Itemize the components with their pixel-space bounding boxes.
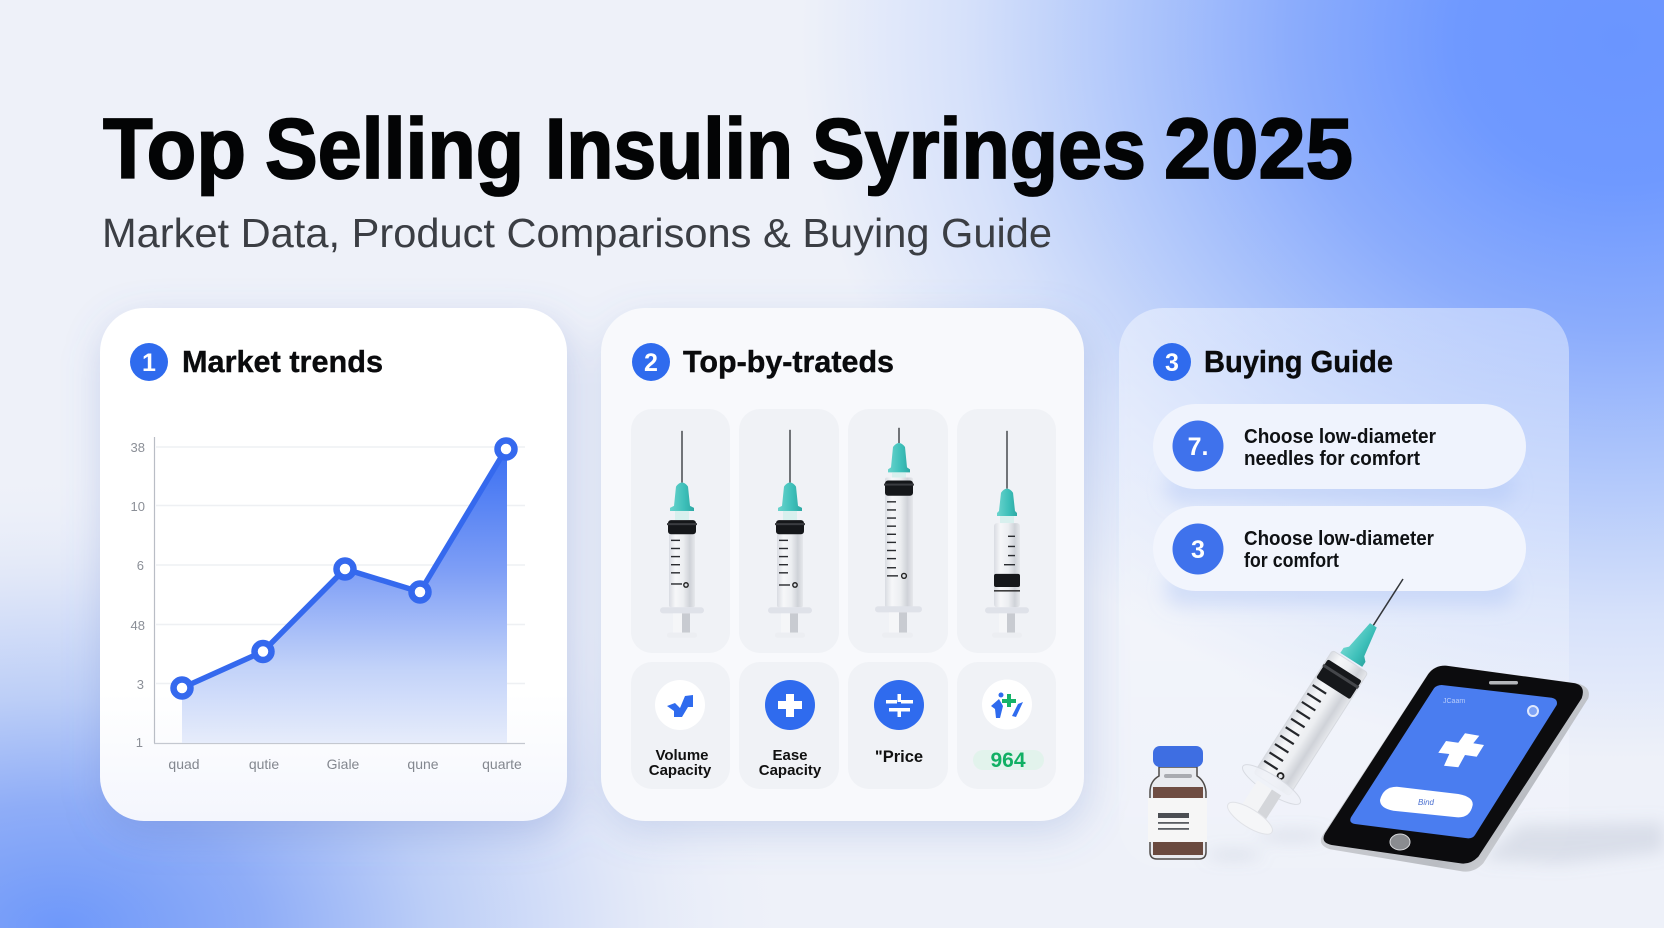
y axis labels: 10 xyxy=(131,499,145,514)
x axis labels: quarte xyxy=(482,756,522,772)
product tiles xyxy=(631,409,1056,789)
syringe 3 xyxy=(875,428,922,638)
label: volume capacity: Capacity xyxy=(649,762,712,779)
chart area fill xyxy=(182,449,507,743)
title: Selling xyxy=(265,102,524,197)
title: Syringes xyxy=(812,102,1146,197)
trend line xyxy=(182,449,506,688)
tip 1: 7. xyxy=(1188,433,1208,461)
heading badge 3 xyxy=(1153,343,1191,381)
icon: ease xyxy=(765,680,815,730)
label: ease capacity: Ease xyxy=(772,747,808,764)
score pill xyxy=(973,749,1044,772)
heading badge 2: 2 xyxy=(644,349,658,377)
panel: market trends xyxy=(100,308,567,821)
phone button xyxy=(1380,787,1473,817)
heading: buying guide: Buying Guide xyxy=(1204,344,1393,379)
heading badge 1: 1 xyxy=(142,349,156,377)
phone status text: JCaam xyxy=(1443,698,1465,705)
syringe 1 xyxy=(660,431,704,638)
tip 1: needles for comfort xyxy=(1244,448,1420,470)
heading badge 1 xyxy=(130,343,168,381)
phone cross icon xyxy=(1438,733,1484,767)
x axis labels xyxy=(168,756,522,772)
heading: market trends: Market trends xyxy=(182,344,383,379)
phone speaker xyxy=(1489,681,1518,684)
subtitle: Market Data, Product Comparisons & Buying Guide xyxy=(102,210,1052,256)
x axis labels: qutie xyxy=(249,756,279,772)
title xyxy=(103,102,1353,197)
icon: volume xyxy=(655,680,705,730)
icon: price xyxy=(874,680,924,730)
title: 2025 xyxy=(1164,102,1353,197)
tip 2: 3 xyxy=(1191,536,1205,564)
tip 1: Choose low-diameter xyxy=(1244,426,1436,448)
title: Top xyxy=(103,102,246,197)
label: volume capacity: Volume xyxy=(655,747,709,764)
heading badge 3: 3 xyxy=(1165,349,1179,377)
label: price: "Price xyxy=(875,748,923,766)
phone target icon xyxy=(1528,706,1538,716)
heading badge 2 xyxy=(632,343,670,381)
phone bezel xyxy=(1324,666,1583,864)
tip 1 xyxy=(1153,404,1526,489)
x axis labels: quad xyxy=(168,756,200,772)
phone button: Bind xyxy=(1418,798,1435,807)
score pill: 964 xyxy=(990,749,1026,772)
area line chart xyxy=(131,437,525,772)
icon: mixed marks xyxy=(982,680,1032,730)
heading: top-by-trateds: Top-by-trateds xyxy=(683,344,894,379)
panel shadows xyxy=(104,322,1088,832)
illustration: phone xyxy=(1321,666,1589,872)
y axis labels: 38 xyxy=(131,440,145,455)
illustration: syringe xyxy=(1216,561,1432,844)
y axis labels: 1 xyxy=(136,735,143,750)
panel: top products xyxy=(601,308,1084,821)
title: Insulin xyxy=(545,102,793,197)
y axis labels: 6 xyxy=(137,558,144,573)
label: ease capacity: Capacity xyxy=(759,762,822,779)
tip 2: for comfort xyxy=(1244,550,1339,572)
data points xyxy=(174,440,514,696)
syringe 4 xyxy=(985,431,1029,638)
x axis labels: qune xyxy=(407,756,439,772)
panel: buying guide xyxy=(1119,308,1569,868)
illustration: vial xyxy=(1148,746,1207,859)
phone home button xyxy=(1390,834,1410,850)
ground shadows xyxy=(1206,822,1664,864)
syringe 2 xyxy=(768,430,812,638)
y axis labels xyxy=(131,440,145,750)
tip 2 xyxy=(1153,506,1526,591)
pill shadows xyxy=(1165,470,1515,606)
phone screen xyxy=(1350,685,1557,838)
y axis labels: 3 xyxy=(137,677,144,692)
phone body xyxy=(1321,666,1589,872)
x axis labels: Giale xyxy=(327,756,360,772)
y axis labels: 48 xyxy=(131,618,145,633)
tip 2: Choose low-diameter xyxy=(1244,528,1434,550)
